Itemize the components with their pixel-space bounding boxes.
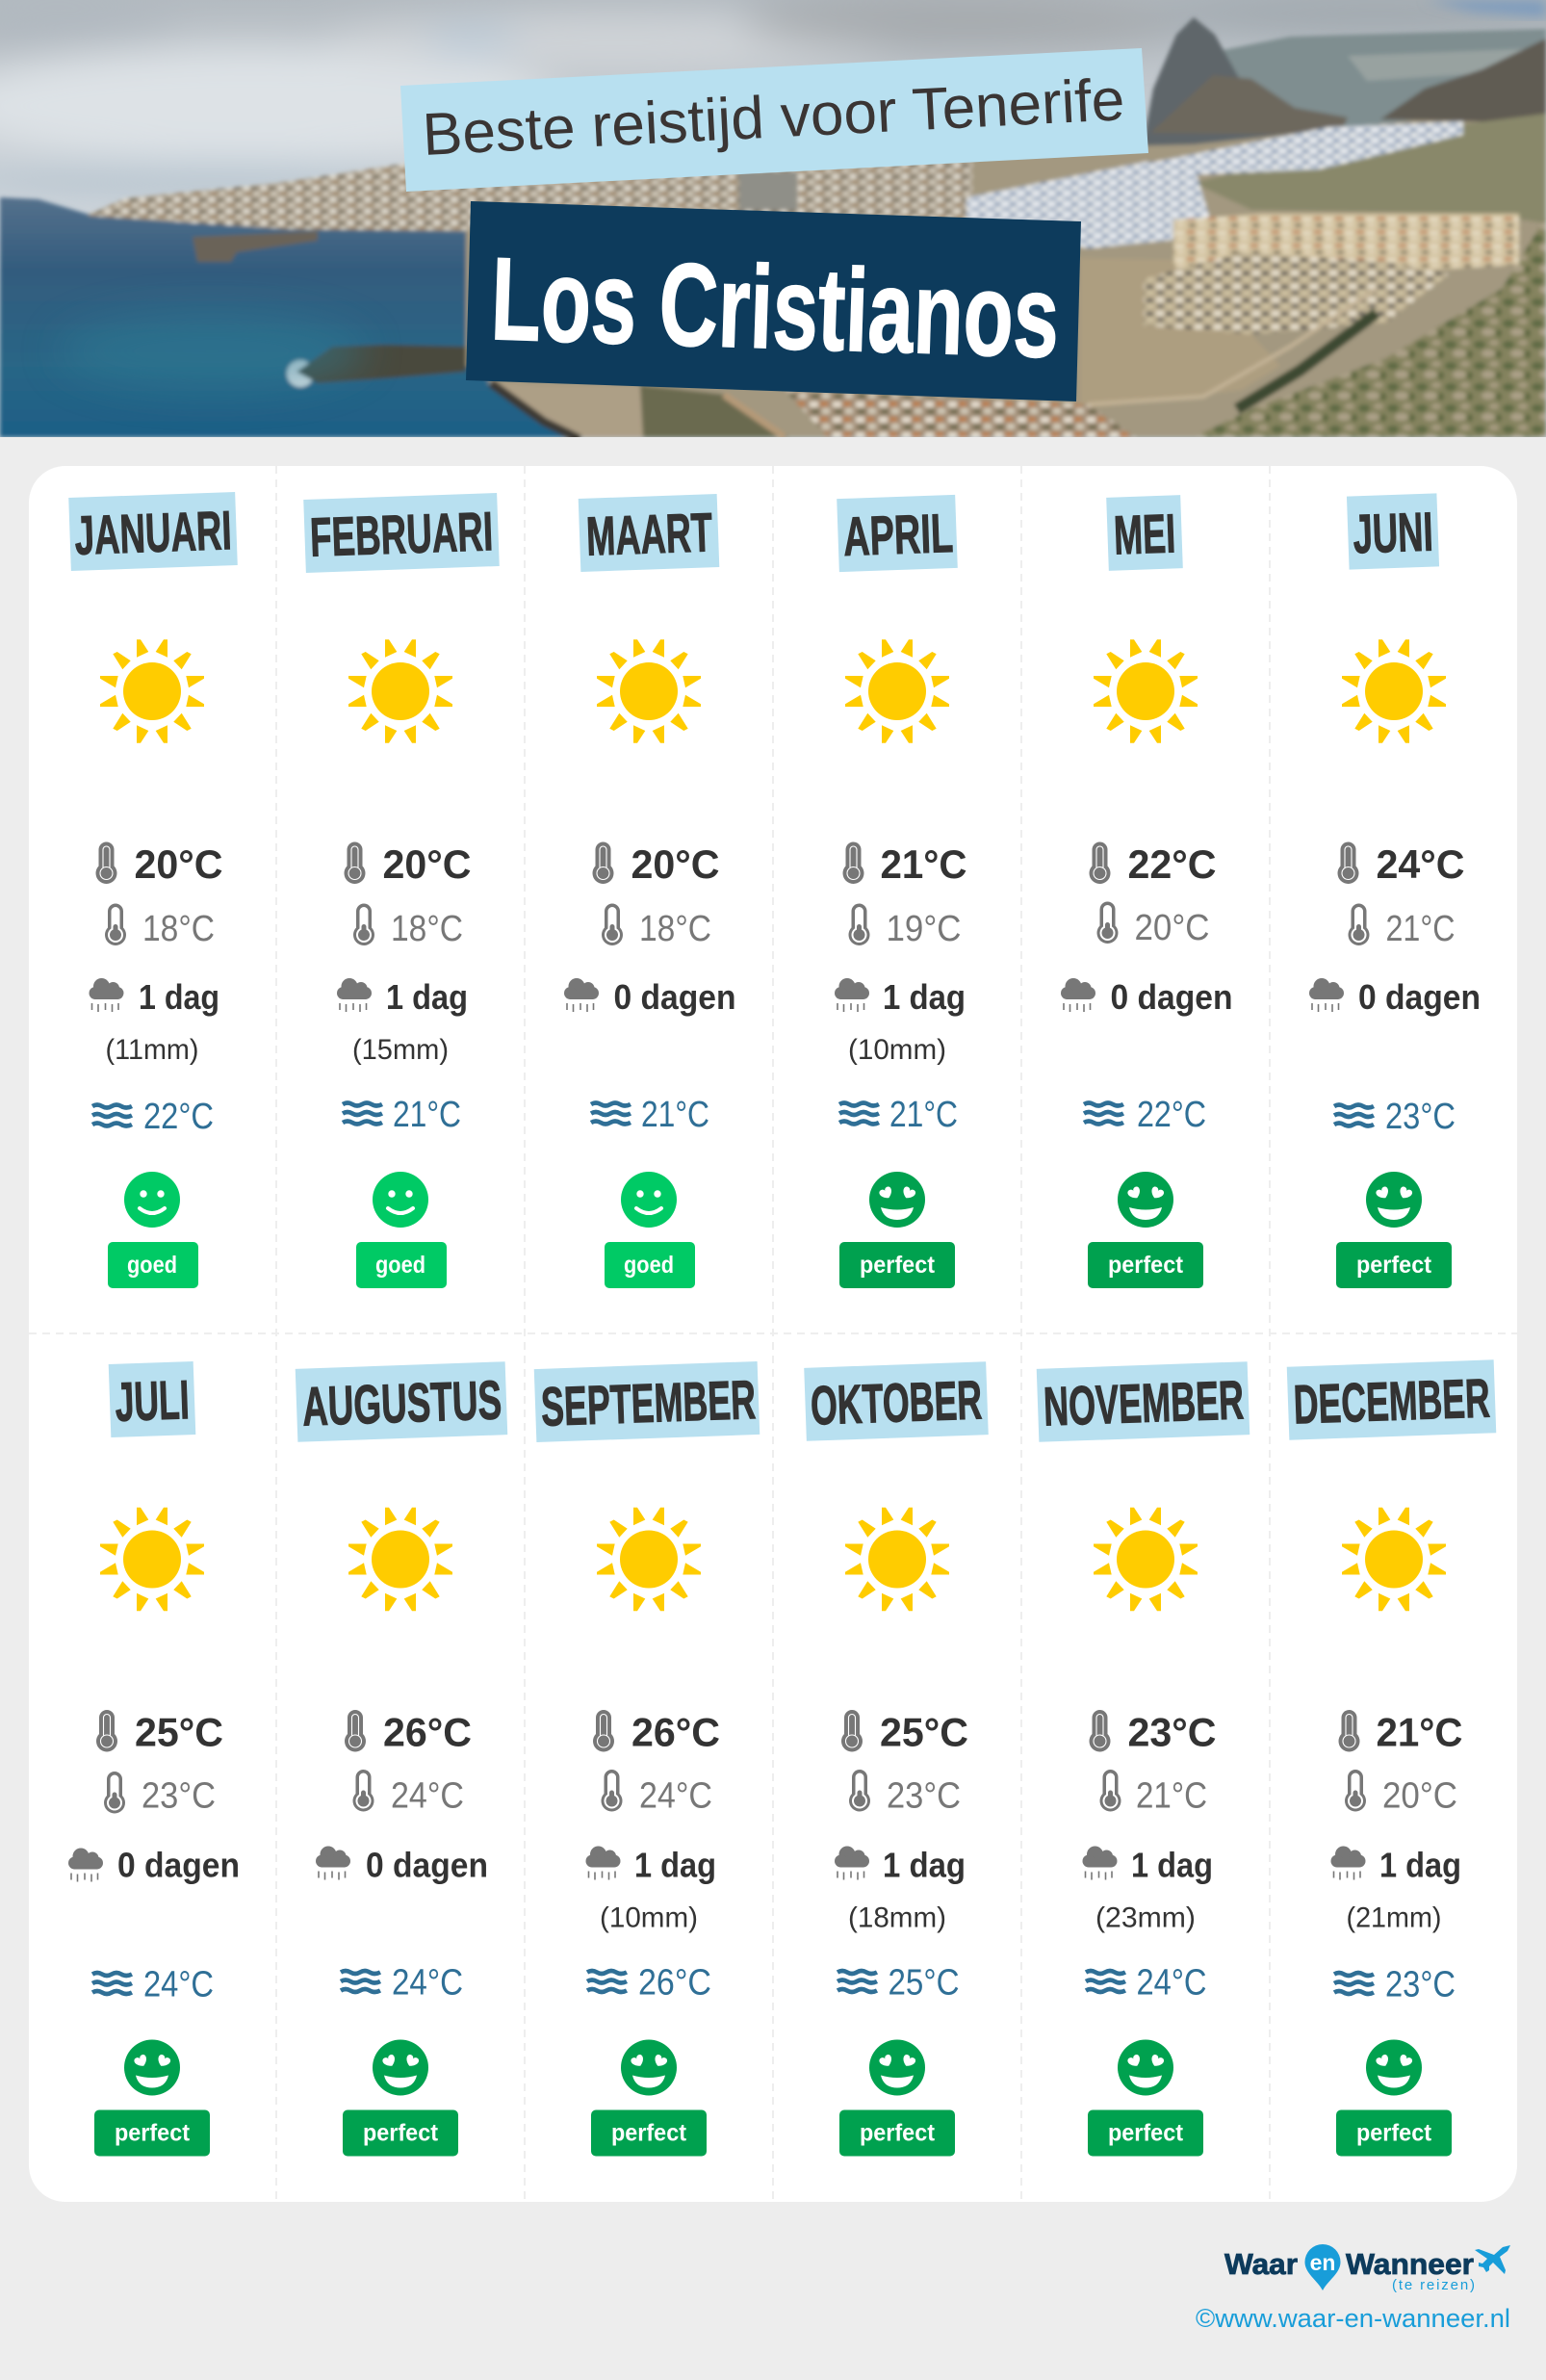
month heading: april [837,495,958,572]
month data: januari: (11mm) [106,1034,198,1066]
white card panel [29,466,1517,2202]
month data: oktober: 25°C [888,1962,959,2003]
month data: februari: 1 dag [386,977,468,1017]
panel: september [534,1361,760,2157]
month data: november: 24°C [1136,1962,1207,2003]
month data: juni [1309,639,1481,1288]
subtitle label: Beste reistijd voor Tenerife [421,66,1126,168]
month data: januari [89,639,223,1288]
month heading: juni [1347,493,1439,570]
month data: februari: 21°C [393,1095,461,1135]
month data: januari: 1 dag [139,977,219,1017]
month heading: september: SEPTEMBER [540,1369,757,1438]
month data: mei: 20°C [1134,908,1209,948]
month data: april [835,639,966,1288]
month heading: november [1037,1361,1250,1442]
month data: februari: goed [375,1252,425,1279]
month heading: april: APRIL [842,503,954,568]
panel: oktober [804,1361,989,2157]
footer url: ©www.waar-en-wanneer.nl [1196,2304,1510,2333]
month heading: januari: JANUARI [74,500,233,567]
month data: juni: 24°C [1377,841,1465,887]
month data: juni: 21°C [1386,909,1456,949]
month data: april: 19°C [886,909,961,949]
month heading: maart: MAART [585,502,713,568]
icon: map pin with en [1305,2244,1340,2290]
month heading: januari [68,492,238,571]
month data: december: (21mm) [1346,1902,1442,1933]
panel: mei [1061,495,1232,1288]
month data: september: perfect [611,2120,687,2147]
month data: maart: 20°C [631,841,720,887]
month data: mei [1061,639,1232,1288]
month heading: juli: JULI [114,1369,191,1434]
month data: juni: 0 dagen [1358,977,1481,1017]
month heading: mei: MEI [1113,503,1176,567]
month heading: mei [1106,495,1183,571]
month data: oktober: 25°C [880,1710,968,1754]
month data: november [1082,1508,1217,2157]
month heading: november: NOVEMBER [1043,1369,1245,1438]
month heading: februari [303,493,500,573]
month data: augustus [316,1508,488,2157]
month data: september: 1 dag [634,1845,716,1885]
month data: januari: goed [127,1252,177,1279]
icon: airplane [1475,2245,1510,2274]
month data: oktober: (18mm) [848,1902,946,1933]
month data: april: perfect [860,1252,936,1279]
month data: mei: perfect [1108,1252,1184,1279]
main title label [466,201,1081,401]
month data: december [1330,1508,1463,2157]
panel: juli [68,1361,240,2157]
month data: april: 21°C [889,1095,958,1135]
month data: september: 24°C [639,1775,712,1816]
footer logo: Waar en Wanneer [1224,2244,1510,2293]
month data: juli: 23°C [142,1775,216,1816]
month data: juli: 25°C [135,1710,223,1754]
month data: maart: 21°C [641,1095,709,1135]
month data: mei: 0 dagen [1111,977,1232,1017]
month data: augustus: 24°C [392,1962,463,2003]
month data: april: (10mm) [848,1034,946,1066]
footer logo: Waar en Wanneer: (te reizen) [1392,2277,1475,2293]
panel: november [1037,1361,1250,2157]
month data: februari: (15mm) [352,1034,449,1066]
panel: maart [564,494,735,1288]
month heading: augustus: AUGUSTUS [301,1369,502,1438]
header photo: coastline of Los Cristianos [0,0,1546,439]
month data: november: 1 dag [1131,1845,1213,1885]
panel: juni [1309,493,1481,1288]
month data: februari: 18°C [391,909,463,949]
month heading: maart [579,494,719,572]
month data: oktober: 23°C [887,1775,961,1816]
month data: augustus: 26°C [383,1710,472,1754]
month data: augustus: perfect [363,2120,439,2147]
month heading: augustus [296,1361,507,1442]
month data: november: (23mm) [1095,1902,1196,1933]
month data: augustus: 0 dagen [366,1845,488,1885]
month data: februari [337,639,472,1288]
month heading: februari: FEBRUARI [309,501,494,569]
month data: juli: 24°C [143,1964,214,2005]
main title label: Los Cristianos [489,233,1061,382]
footer logo: Waar en Wanneer: Wanneer [1346,2247,1474,2281]
footer logo: Waar en Wanneer: Waar [1224,2247,1298,2281]
month data: juni: perfect [1356,1252,1432,1279]
month data: november: 21°C [1136,1775,1207,1816]
month data: juni: 23°C [1385,1097,1456,1137]
month data: april: 1 dag [883,977,966,1017]
month data: oktober: perfect [860,2120,936,2147]
month data: augustus: 24°C [391,1775,464,1816]
month data: februari: 20°C [383,841,472,887]
month data: mei: 22°C [1128,841,1217,887]
month data: december: 20°C [1382,1775,1457,1816]
icon: map pin with en: en [1310,2250,1335,2275]
panel: april [835,495,966,1288]
month data: december: 1 dag [1379,1845,1461,1885]
month data: januari: 22°C [143,1097,214,1137]
month data: mei: 22°C [1137,1095,1206,1135]
month heading: oktober [804,1361,989,1441]
month data: september [585,1508,720,2157]
month data: december: perfect [1356,2120,1432,2147]
month heading: oktober: OKTOBER [810,1369,983,1437]
month data: september: 26°C [631,1710,720,1754]
month data: april: 21°C [880,841,966,887]
month data: januari: 20°C [135,841,223,887]
month data: oktober: 1 dag [883,1845,966,1885]
month data: december: 23°C [1385,1964,1456,2005]
month data: november: 23°C [1128,1710,1217,1754]
month data: oktober [835,1508,968,2157]
month data: maart: 0 dagen [614,977,735,1017]
month data: maart [564,639,735,1288]
panel: februari [303,493,500,1288]
subtitle label [400,48,1148,192]
month data: juli: perfect [115,2120,191,2147]
month data: maart: 18°C [639,909,711,949]
panel: augustus [296,1361,507,2157]
month heading: juli [109,1361,195,1437]
panel: december [1287,1359,1496,2157]
month data: september: (10mm) [600,1902,698,1933]
month heading: juni: JUNI [1352,502,1434,565]
month data: september: 26°C [638,1962,711,2003]
panel: januari [68,492,238,1288]
month data: juli: 0 dagen [117,1845,240,1885]
month data: december: 21°C [1377,1710,1463,1754]
month heading: september [534,1361,760,1442]
month data: juli [68,1508,240,2157]
month data: november: perfect [1108,2120,1184,2147]
month data: januari: 18°C [142,909,215,949]
month data: maart: goed [624,1252,674,1279]
